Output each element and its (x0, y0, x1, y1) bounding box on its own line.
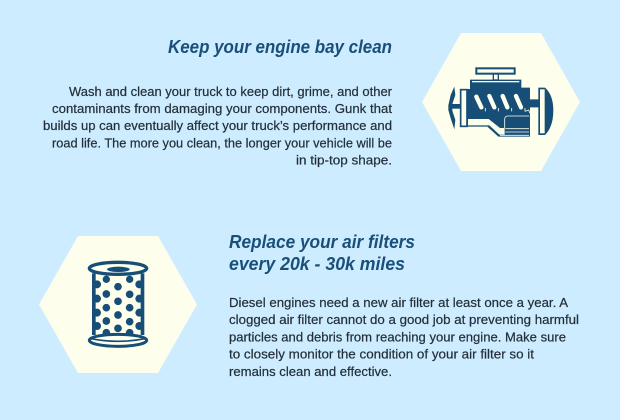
text block: engine bay body: builds up can eventually affect your truck’s performance and (43, 118, 392, 133)
text block: air filter body: clogged air filter cannot do a good job at preventing harmful (229, 312, 579, 327)
text block: air filter body: to closely monitor the condition of your air filter so it (229, 346, 534, 362)
text block: engine bay body: contaminants from damaging your components. Gunk that (52, 101, 392, 116)
hexagon: filter background (39, 236, 197, 373)
text block: air filter body: remains clean and effective. (229, 364, 392, 379)
text block: engine bay body: in tip-top shape. (296, 152, 392, 168)
engine drawing (448, 68, 553, 137)
title: replace your air filters (229, 231, 415, 274)
text block: air filter body (229, 295, 579, 379)
hexagon: engine background (422, 33, 580, 171)
title: replace your air filters: every 20k - 30k miles (229, 253, 405, 274)
title: keep your engine bay clean: Keep your engine bay clean (168, 36, 392, 57)
text block: air filter body: Diesel engines need a new air filter at least once a year. A (229, 295, 568, 310)
text block: engine bay body (43, 84, 393, 168)
icon: air filter in hexagon (39, 236, 197, 373)
title: replace your air filters: Replace your air filters (229, 231, 415, 252)
text block: engine bay body: Wash and clean your truck to keep dirt, grime, and other (69, 84, 393, 99)
text block: air filter body: particles and debris from reaching your engine. Make sure (229, 330, 566, 344)
icon: engine in hexagon (422, 33, 580, 171)
text block: engine bay body: road life. The more you clean, the longer your vehicle will be (52, 136, 392, 150)
filter drawing (89, 262, 147, 346)
